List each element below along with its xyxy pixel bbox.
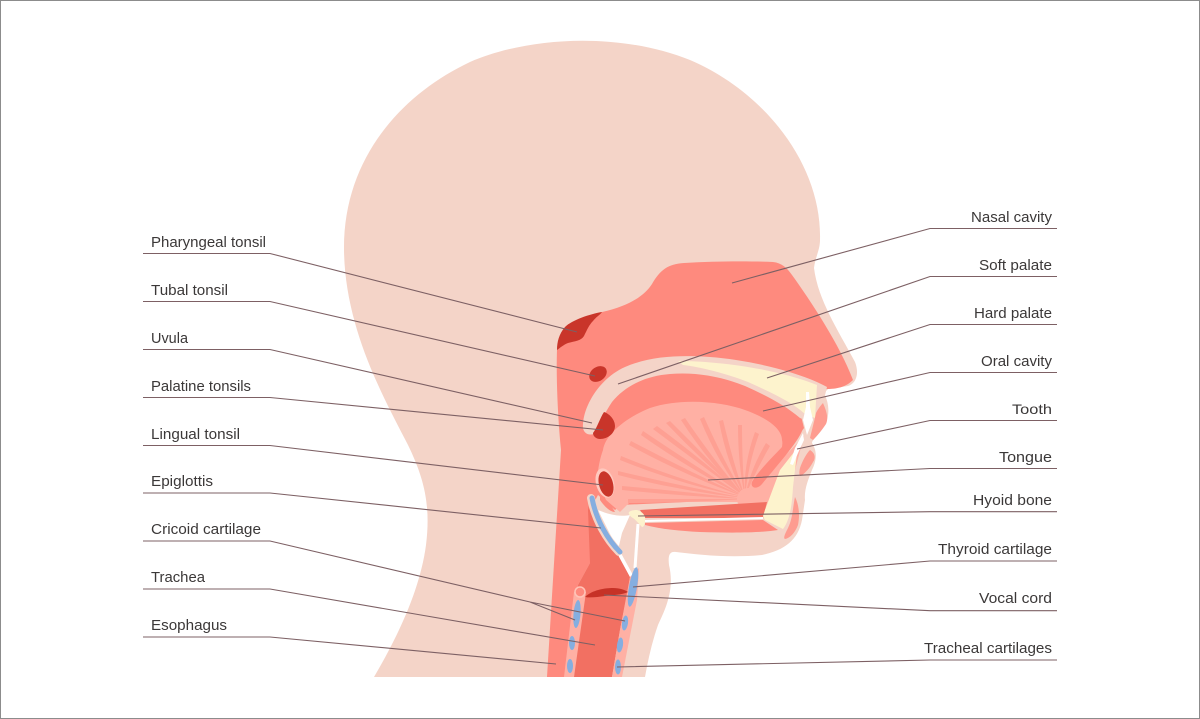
- tubal tonsil: [586, 363, 610, 385]
- label: Pharyngeal tonsil: Pharyngeal tonsil: [151, 234, 266, 251]
- upper tooth: [803, 392, 813, 435]
- label: Hyoid bone: Hyoid bone: [973, 492, 1052, 509]
- label: Tooth: Tooth: [1012, 401, 1052, 417]
- label: Nasal cavity: [732, 209, 1057, 283]
- label: Tooth: [797, 401, 1057, 449]
- label: Palatine tonsils: [143, 378, 603, 430]
- tongue: [597, 402, 804, 512]
- label: Palatine tonsils: Palatine tonsils: [151, 378, 251, 395]
- lower lip: [799, 450, 815, 476]
- label: Esophagus: Esophagus: [151, 617, 227, 634]
- chin tissue: [784, 497, 799, 539]
- label: Thyroid cartilage: [633, 541, 1057, 587]
- label: Lingual tonsil: [143, 426, 603, 485]
- label: Soft palate: [618, 257, 1057, 384]
- label: Hard palate: Hard palate: [974, 305, 1052, 322]
- label: Epiglottis: Epiglottis: [151, 473, 213, 490]
- label: Cricoid cartilage: Cricoid cartilage: [151, 521, 261, 538]
- epiglottis: [591, 498, 620, 552]
- label: Epiglottis: [143, 473, 601, 528]
- label: Nasal cavity: Nasal cavity: [971, 209, 1053, 226]
- larynx and trachea: [574, 500, 630, 677]
- hard palate: [678, 361, 817, 418]
- hyoid bone: [629, 510, 645, 527]
- label: Oral cavity: [763, 353, 1057, 411]
- head silhouette: [344, 41, 857, 677]
- lower tooth: [790, 433, 804, 465]
- tongue muscle fibres: [618, 417, 770, 503]
- label: Tongue: Tongue: [999, 449, 1052, 466]
- label: Vocal cord: Vocal cord: [979, 590, 1052, 607]
- lower tongue lobe: [600, 494, 615, 512]
- upper lip: [810, 403, 827, 440]
- epiglottis gap: [598, 510, 630, 550]
- label: Thyroid cartilage: Thyroid cartilage: [938, 541, 1052, 558]
- white laryngeal gaps: [620, 524, 638, 577]
- label: Tubal tonsil: Tubal tonsil: [151, 282, 228, 299]
- label: Trachea: [143, 569, 595, 645]
- oral cavity: [590, 370, 804, 505]
- label: Uvula: Uvula: [151, 330, 189, 347]
- label: Vocal cord: [604, 590, 1057, 611]
- palatine tonsil: [593, 412, 615, 439]
- oral sliver: [752, 428, 803, 488]
- label: Esophagus: [143, 617, 556, 664]
- floor of mouth muscles: [640, 502, 778, 533]
- label: Oral cavity: Oral cavity: [981, 353, 1052, 370]
- label: Tracheal cartilages: Tracheal cartilages: [924, 640, 1052, 657]
- soft palate: [583, 356, 827, 435]
- label: Hyoid bone: [638, 492, 1057, 516]
- nasal cavity and pharynx: [547, 261, 853, 677]
- label: Soft palate: Soft palate: [979, 257, 1052, 274]
- lingual tonsil: [592, 466, 618, 500]
- lower gum: [745, 436, 804, 510]
- label: Pharyngeal tonsil: [143, 234, 577, 332]
- label: Trachea: Trachea: [151, 569, 206, 586]
- vocal cord: [585, 588, 628, 597]
- label: Lingual tonsil: Lingual tonsil: [151, 426, 240, 443]
- jaw bone: [763, 442, 802, 529]
- label: Hard palate: [767, 305, 1057, 378]
- label: Tongue: [708, 449, 1057, 480]
- esophagus wall: [564, 587, 586, 677]
- label: Tracheal cartilages: [617, 640, 1057, 667]
- pharyngeal tonsil: [557, 312, 602, 350]
- label: Tubal tonsil: [143, 282, 595, 376]
- label: Uvula: [143, 330, 592, 423]
- label: Cricoid cartilage: [143, 521, 625, 621]
- tracheal front wall and cartilages: [612, 567, 640, 677]
